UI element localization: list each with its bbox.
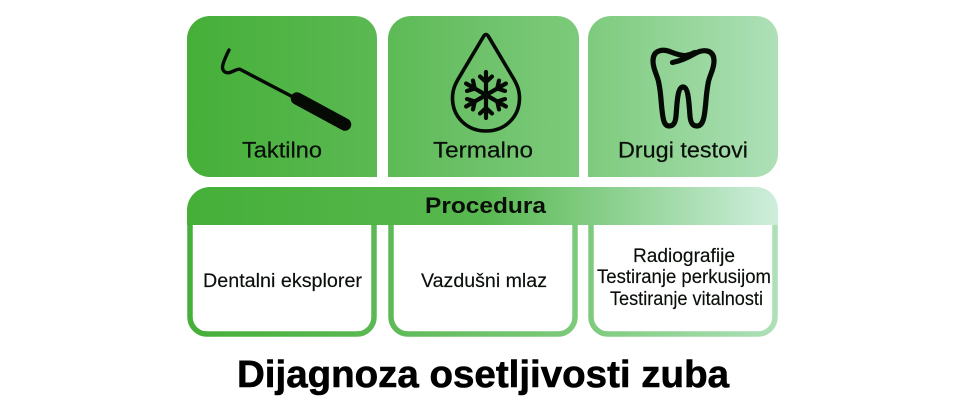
text: third procedure list: Testiranje perkusijom	[597, 267, 771, 288]
header bar	[187, 187, 778, 225]
label: Taktilno: Taktilno	[242, 138, 322, 162]
panel: Procedura	[187, 187, 778, 334]
icon: tooth	[653, 50, 714, 126]
panel: Drugi testovi	[588, 16, 778, 177]
title: Dijagnoza osetljivosti zuba	[237, 354, 730, 396]
heading: Procedura: Procedura	[425, 193, 547, 218]
icon: dental explorer	[222, 50, 345, 124]
panel: Taktilno	[187, 16, 377, 177]
card outline: Dentalni eksplorer	[190, 220, 374, 334]
label: Drugi testovi: Drugi testovi	[618, 138, 748, 162]
text: Vazdušni mlaz: Vazdušni mlaz	[421, 271, 547, 292]
text: Dentalni eksplorer: Dentalni eksplorer	[203, 271, 363, 292]
card outline: Vazdušni mlaz	[391, 220, 575, 334]
text: third procedure list: Testiranje vitalnosti	[610, 289, 763, 310]
label: Termalno: Termalno	[433, 138, 533, 162]
panel: Termalno	[388, 16, 579, 177]
text: third procedure list	[597, 246, 771, 310]
icon: droplet with snowflake	[452, 34, 520, 131]
card outline: Radiografije	[591, 220, 775, 334]
text: third procedure list: Radiografije	[633, 246, 735, 267]
